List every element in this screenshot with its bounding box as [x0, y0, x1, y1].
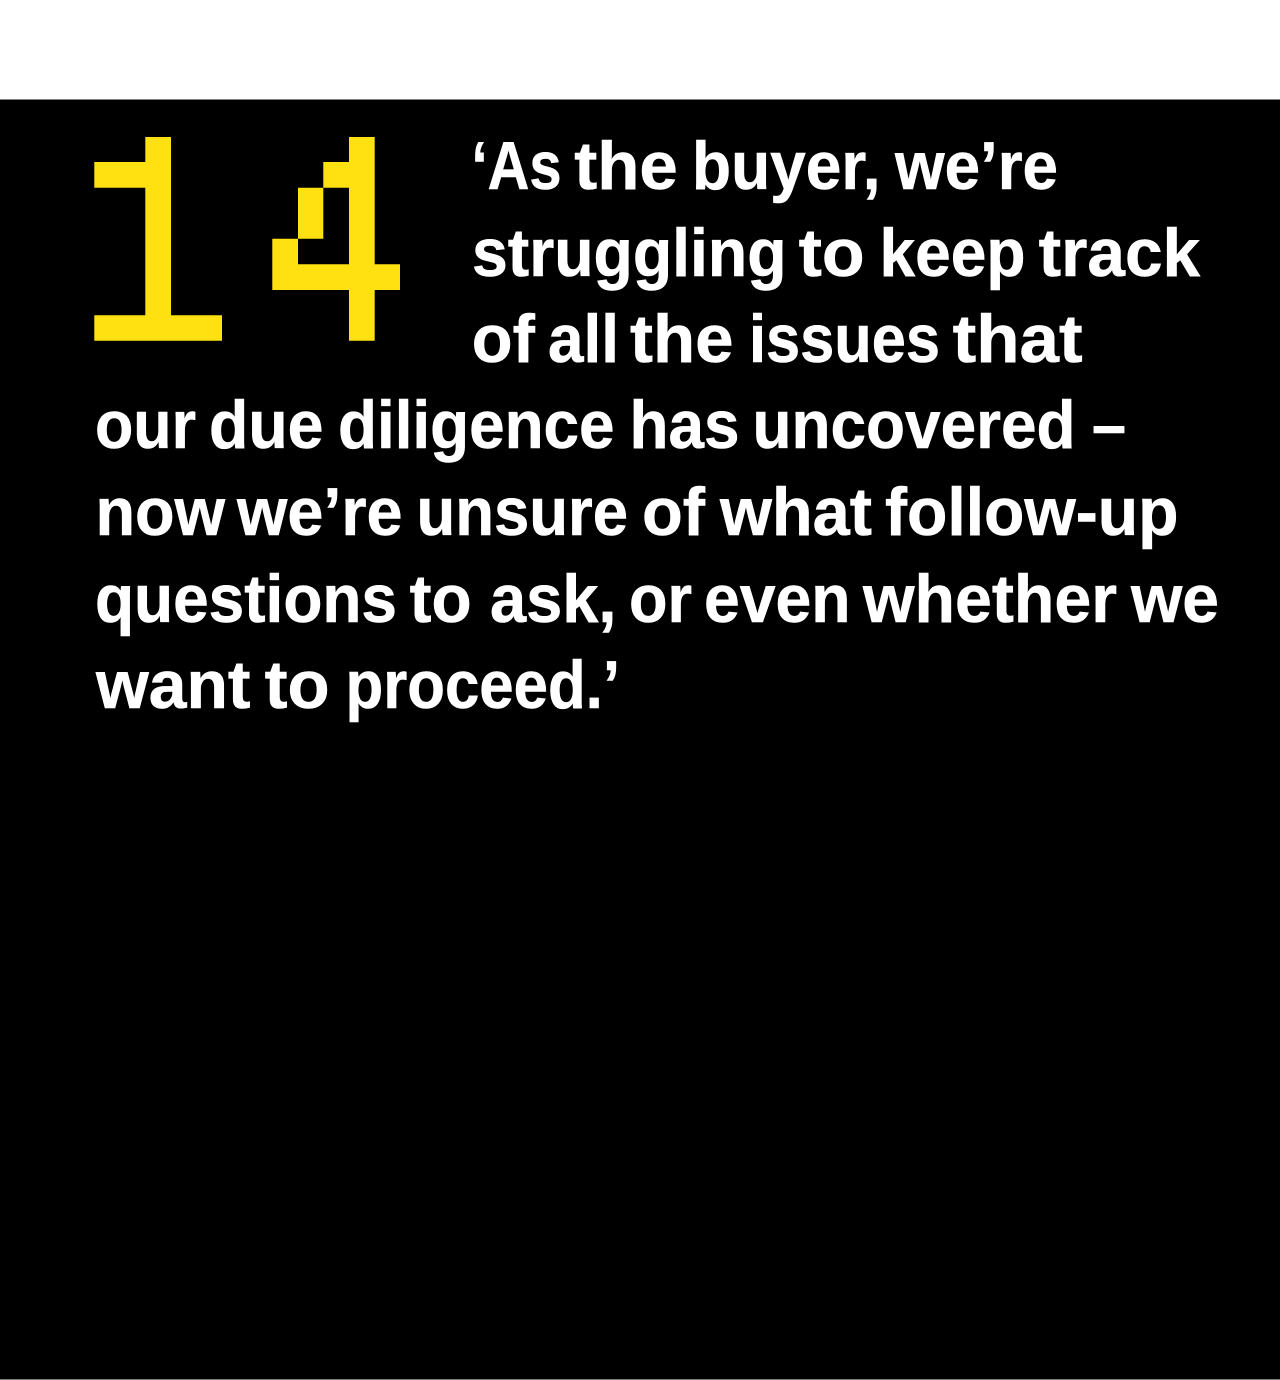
quote text: track	[1039, 215, 1200, 291]
quote text: –	[1092, 387, 1126, 463]
quote text: we’re	[236, 474, 402, 550]
quote text: the	[630, 301, 734, 377]
quote text: buyer,	[692, 128, 880, 204]
quote text: of	[642, 474, 705, 550]
quote text: follow-up	[885, 474, 1178, 550]
quote text: ‘As	[472, 128, 562, 204]
pixel numeral 14	[94, 137, 400, 341]
quote text: has	[630, 387, 740, 463]
quote text: unsure	[416, 474, 628, 550]
quote text: the	[574, 128, 678, 204]
quote text: we	[1130, 561, 1219, 637]
quote text: our	[95, 387, 196, 463]
digit 4	[272, 137, 400, 341]
quote text: or	[629, 561, 692, 637]
digit 1	[94, 137, 222, 341]
quote text: to	[799, 215, 865, 291]
quote text: struggling	[472, 215, 786, 291]
quote text: diligence	[338, 387, 614, 463]
quote text: now	[96, 474, 226, 550]
quote text: of	[472, 301, 535, 377]
quote text: we’re	[894, 128, 1058, 204]
quote text: proceed.’	[346, 647, 620, 723]
quote text: that	[953, 301, 1083, 377]
quote text: all	[548, 301, 619, 377]
quote text: ask,	[490, 561, 616, 637]
quote text: to	[265, 647, 330, 723]
quote text: issues	[749, 301, 940, 377]
quote text: what	[719, 474, 872, 550]
quote text: uncovered	[752, 387, 1076, 463]
quote text	[95, 128, 1219, 723]
quote text: even	[704, 561, 850, 637]
quote text: questions	[95, 561, 397, 637]
quote text: due	[209, 387, 324, 463]
quote text: want	[95, 647, 250, 723]
quote text: to	[410, 561, 472, 637]
quote text: keep	[880, 215, 1026, 291]
quote text: whether	[862, 561, 1117, 637]
